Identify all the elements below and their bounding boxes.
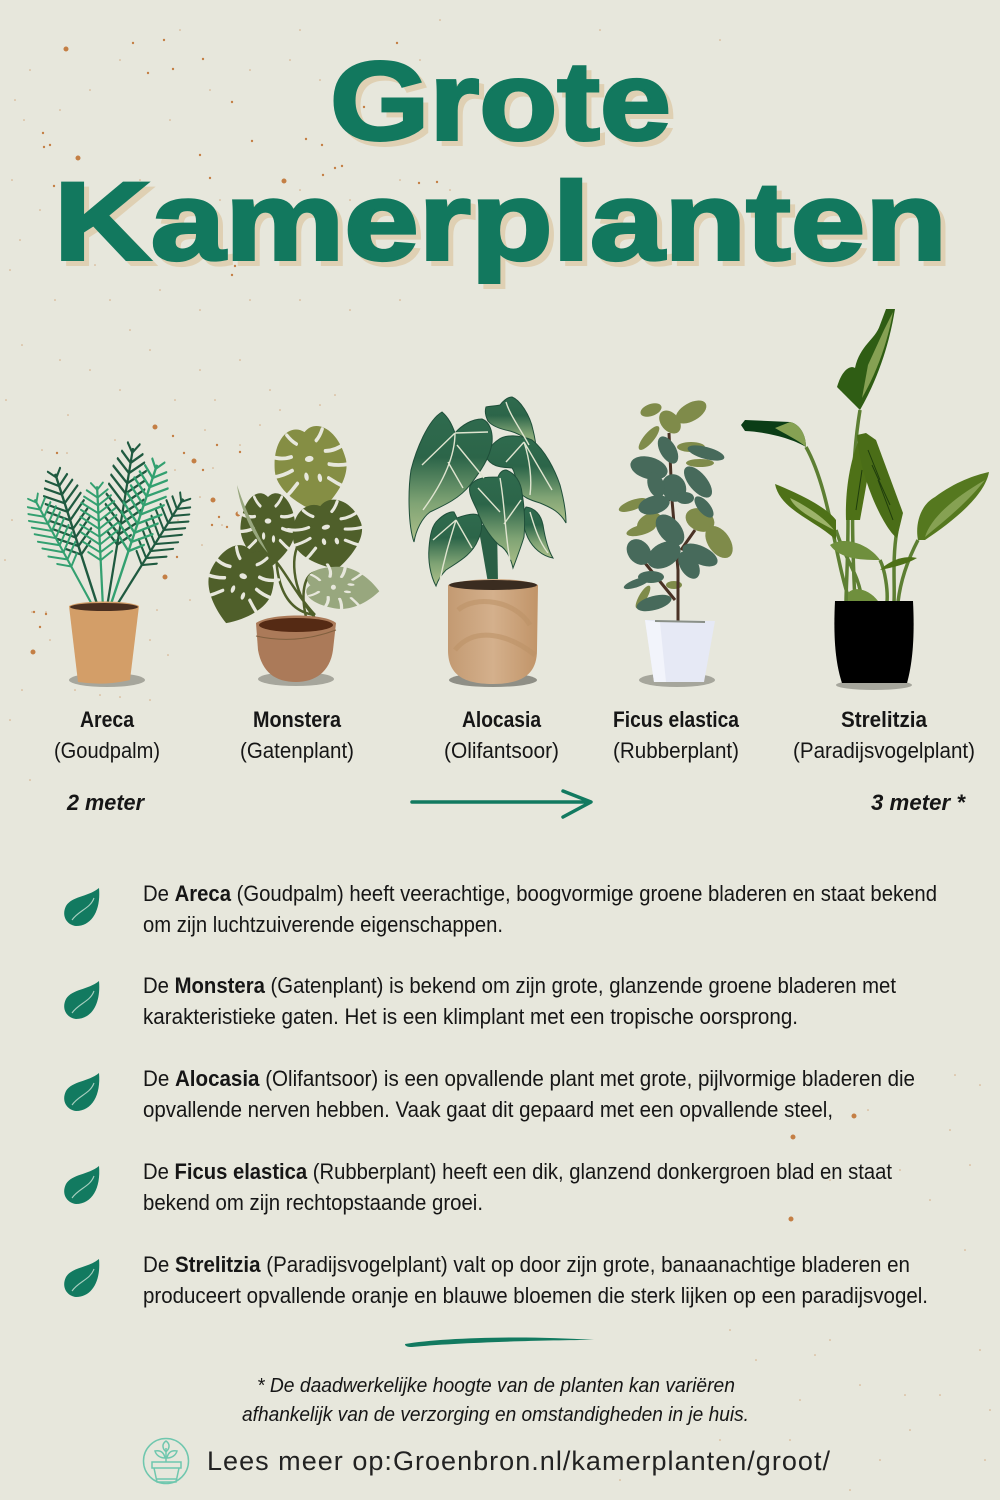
divider brush stroke [405,1337,594,1347]
text: Ficus elastica [143,1159,892,1215]
text: Ficus elastica: bekend om zijn rechtopstaande groei. [143,1190,483,1215]
label: Areca: (Goudpalm) [54,738,160,763]
plant: Alocasia [409,397,566,687]
text: Monstera: karakteristieke gaten. Het is een klimplant met een tropische oorsprong. [143,1004,798,1029]
link text: Lees meer op:Groenbron.nl/kamerplanten/groot/ [207,1446,830,1476]
text: Ficus elastica: De Ficus elastica (Rubberplant) heeft een dik, glanzend donkergroen blad en staat [143,1159,892,1184]
label: Monstera: (Gatenplant) [240,738,354,763]
title [54,40,952,288]
label: Areca [54,707,160,763]
text: Strelitzia: produceert opvallende oranje en blauwe bloemen die sterk lijken op een paradijsvogel. [143,1283,928,1308]
text: Strelitzia [143,1252,928,1308]
text: Areca: om zijn luchtzuiverende eigenschappen. [143,912,503,937]
footnote: afhankelijk van de verzorging en omstandigheden in je huis. [242,1404,749,1426]
icon: leaf 4 [64,1166,99,1204]
icon: leaf 2 [64,981,99,1019]
plant: Monstera [194,421,381,686]
title: Kamerplanten [59,164,952,288]
label: Strelitzia: (Paradijsvogelplant) [793,738,975,763]
text: Alocasia: De Alocasia (Olifantsoor) is een opvallende plant met grote, pijlvormige bladeren die [143,1066,915,1091]
plant: Strelitzia [741,309,989,690]
text: Strelitzia: De Strelitzia (Paradijsvogelplant) valt op door zijn grote, banaanachtige bladeren en [143,1252,910,1277]
title: Grote [330,40,671,164]
label: Areca: Areca [80,707,135,732]
text: Monstera [143,973,896,1029]
label: Monstera: Monstera [253,707,342,732]
plant: Areca [18,441,201,687]
label: Strelitzia [793,707,975,763]
icon: logo plant pot [144,1438,188,1484]
label: Ficus elastica [613,707,740,763]
label: Alocasia [444,707,559,763]
label: Ficus elastica: Ficus elastica [613,707,740,732]
label: Alocasia: (Olifantsoor) [444,738,559,763]
title: Kamerplanten [54,160,947,284]
height label: 2 meter: 2 meter [66,790,145,815]
footnote [242,1375,749,1426]
plant: Ficus elastica [617,396,738,687]
text: Monstera: De Monstera (Gatenplant) is bekend om zijn grote, glanzende groene bladeren met [143,973,896,998]
text: Alocasia: opvallende nerven hebben. Vaak gaat dit gepaard met een opvallende steel, [143,1097,833,1122]
text: Areca [143,881,937,937]
icon: leaf 1 [64,888,99,926]
label: Alocasia: Alocasia [462,707,542,732]
label: Monstera [240,707,354,763]
label: Strelitzia: Strelitzia [841,707,928,732]
text: Alocasia [143,1066,915,1122]
footnote: * De daadwerkelijke hoogte van de planten kan variëren [257,1375,735,1397]
height label: 3 meter: 3 meter * [871,790,966,815]
arrow [412,791,591,817]
label: Ficus elastica: (Rubberplant) [613,738,739,763]
text: Areca: De Areca (Goudpalm) heeft veerachtige, boogvormige groene bladeren en staat bekend [143,881,937,906]
icon: leaf 5 [64,1259,99,1297]
icon: leaf 3 [64,1073,99,1111]
title: Grote [335,44,676,168]
